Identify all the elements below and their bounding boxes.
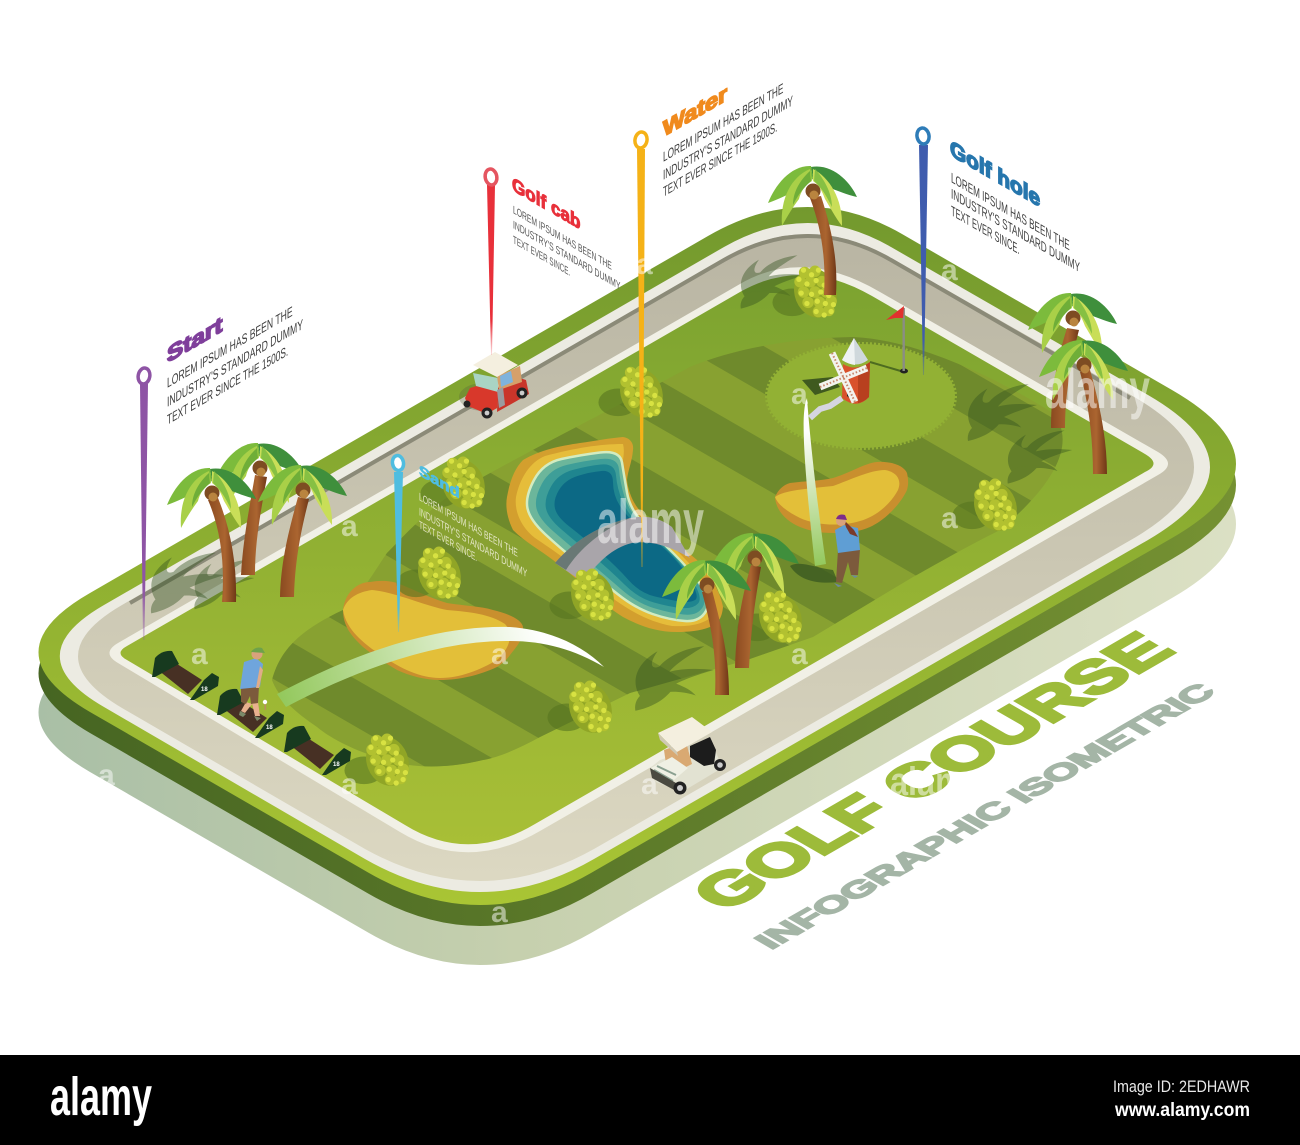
pin: golf hole xyxy=(916,127,930,375)
label: sand: Sand xyxy=(419,462,460,503)
road surface xyxy=(78,234,1194,881)
sand bunker left xyxy=(343,581,523,680)
tee mat 3: 18 xyxy=(333,762,340,768)
watermarks: a xyxy=(791,638,808,671)
palm tree at top xyxy=(768,166,857,295)
label: water: INDUSTRY'S STANDARD DUMMY xyxy=(663,92,793,183)
label: golf cab: Golf cab xyxy=(512,174,580,235)
woman golfer xyxy=(790,514,860,587)
panel: isometric course platform xyxy=(38,207,1236,965)
red golf cart xyxy=(459,352,529,418)
ball flight arc: long drive xyxy=(277,627,604,707)
watermarks: a xyxy=(791,378,808,411)
platform side xyxy=(38,228,1236,926)
watermarks: a xyxy=(98,759,115,792)
tee mat 1: 18 xyxy=(201,687,208,693)
fairway with mowing stripes xyxy=(272,337,1063,766)
footer bar xyxy=(0,1055,1300,1145)
watermarks: alamy xyxy=(1045,357,1150,420)
label: sand xyxy=(419,462,528,594)
watermarks: a xyxy=(641,768,658,801)
palm pair on the right xyxy=(1028,293,1128,474)
label: golf hole xyxy=(950,135,1080,293)
bridge xyxy=(555,517,690,582)
label: start: LOREM IPSUM HAS BEEN THE xyxy=(167,302,293,391)
website: www.alamy.com xyxy=(1114,1100,1250,1121)
title: golf course: GOLF COURSE xyxy=(677,624,1188,919)
watermarks: a xyxy=(636,248,653,281)
windmill xyxy=(802,338,870,418)
palm cluster at start xyxy=(167,443,347,602)
road edge line xyxy=(130,236,1130,603)
palm shadows xyxy=(151,255,1072,711)
grass xyxy=(120,275,1154,844)
pin: golf cab xyxy=(484,168,498,355)
bushes xyxy=(344,262,1024,792)
watermarks: alamy xyxy=(890,760,983,804)
label: start: TEXT EVER SINCE THE 1500S. xyxy=(167,342,288,428)
label: golf hole: Golf hole xyxy=(950,135,1040,212)
white golf cart xyxy=(650,717,726,794)
inner kerb xyxy=(110,267,1168,852)
footer logo: alamy xyxy=(50,1067,152,1127)
label: sand: INDUSTRY'S STANDARD DUMMY xyxy=(419,506,528,581)
label: golf hole: TEXT EVER SINCE. xyxy=(951,202,1019,258)
ball flight arc: approach xyxy=(804,398,826,566)
watermarks: a xyxy=(491,896,508,929)
palm pair by pond xyxy=(662,533,799,695)
label: start: Start xyxy=(167,311,223,368)
watermarks: a xyxy=(191,638,208,671)
flag and golf hole xyxy=(870,306,908,374)
putting green xyxy=(767,344,955,448)
label: golf hole: INDUSTRY'S STANDARD DUMMY xyxy=(951,185,1080,276)
sand bunker right xyxy=(775,462,908,533)
label: water: TEXT EVER SINCE THE 1500S. xyxy=(663,118,777,200)
tee mat 2: 18 xyxy=(266,725,273,731)
label: water: Water xyxy=(663,80,728,142)
road outer kerb xyxy=(60,223,1210,892)
tee mat 3 xyxy=(284,726,351,775)
subtitle: infographic isometric: INFOGRAPHIC ISOMETRIC xyxy=(747,678,1223,954)
platform top xyxy=(38,207,1236,905)
label: golf cab xyxy=(512,174,621,308)
label: sand: LOREM IPSUM HAS BEEN THE xyxy=(419,491,518,560)
label: sand: TEXT EVER SINCE. xyxy=(419,519,477,565)
watermarks: a xyxy=(341,768,358,801)
pin: sand xyxy=(391,455,405,632)
watermarks: a xyxy=(341,510,358,543)
golfer at tee xyxy=(239,648,267,721)
watermarks: a xyxy=(941,502,958,535)
watermarks: a xyxy=(941,254,958,287)
pond with sandy banks xyxy=(506,437,723,632)
pin: start xyxy=(137,367,151,640)
tee mat 1 xyxy=(152,651,219,700)
watermarks xyxy=(98,248,1150,929)
tee mat 2 xyxy=(217,689,284,738)
watermarks: a xyxy=(491,638,508,671)
pin: water xyxy=(634,131,648,567)
label: golf hole: LOREM IPSUM HAS BEEN THE xyxy=(951,169,1070,254)
label: golf cab: TEXT EVER SINCE. xyxy=(513,234,570,279)
label: start: INDUSTRY'S STANDARD DUMMY xyxy=(167,315,303,410)
label: golf cab: INDUSTRY'S STANDARD DUMMY xyxy=(513,219,621,293)
watermarks: alamy xyxy=(597,488,704,557)
label: water: LOREM IPSUM HAS BEEN THE xyxy=(663,79,783,165)
label: golf cab: LOREM IPSUM HAS BEEN THE xyxy=(513,204,612,273)
image id: Image ID: 2EDHAWR xyxy=(1113,1077,1250,1096)
ground shadow xyxy=(38,267,1236,965)
